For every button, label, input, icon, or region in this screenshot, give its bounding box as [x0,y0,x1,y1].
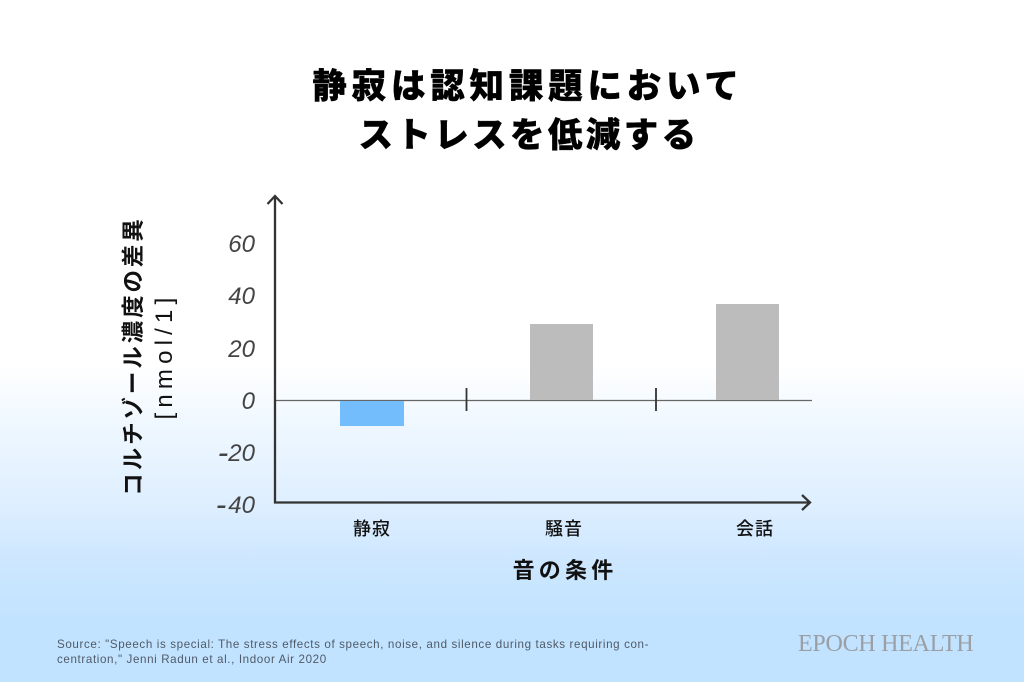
logo: Epoch Health: EPOCH HEALTH [798,631,973,657]
title: 静寂は認知課題において [312,68,744,106]
category label: noise: 騒音 [545,519,583,539]
y axis tick labels: 40 [228,283,256,310]
category separators [466,388,656,411]
source note [57,638,649,666]
y axis tick labels [216,231,256,522]
source note: Source: "Speech is special: The stress effects of speech, noise, and silence during tasks requiring con- [57,638,649,651]
zero line [275,400,812,402]
axes with arrows [268,196,810,510]
bar: noise [530,324,593,400]
y axis tick labels: 20 [227,336,256,363]
y axis title: コルチゾール濃度の差異 [121,216,146,496]
y axis tick labels: 20 [227,440,256,467]
category label: speech: 会話 [736,519,774,539]
y axis tick labels: 60 [228,231,256,258]
y axis tick labels: 0 [242,388,256,415]
y axis tick labels: - [218,434,228,470]
y axis title: [nmol/1] [151,293,178,420]
y axis tick labels: 40 [228,492,256,519]
x axis title: 音の条件 [513,558,617,583]
y axis tick labels: - [216,486,226,522]
category label: silence: 静寂 [353,519,391,539]
title: ストレスを低減する [358,117,700,155]
y axis title [121,216,178,496]
bar: speech [716,304,779,400]
title [312,68,744,155]
source note: centration," Jenni Radun et al., Indoor Air 2020 [57,653,327,666]
bar: silence [340,401,404,426]
